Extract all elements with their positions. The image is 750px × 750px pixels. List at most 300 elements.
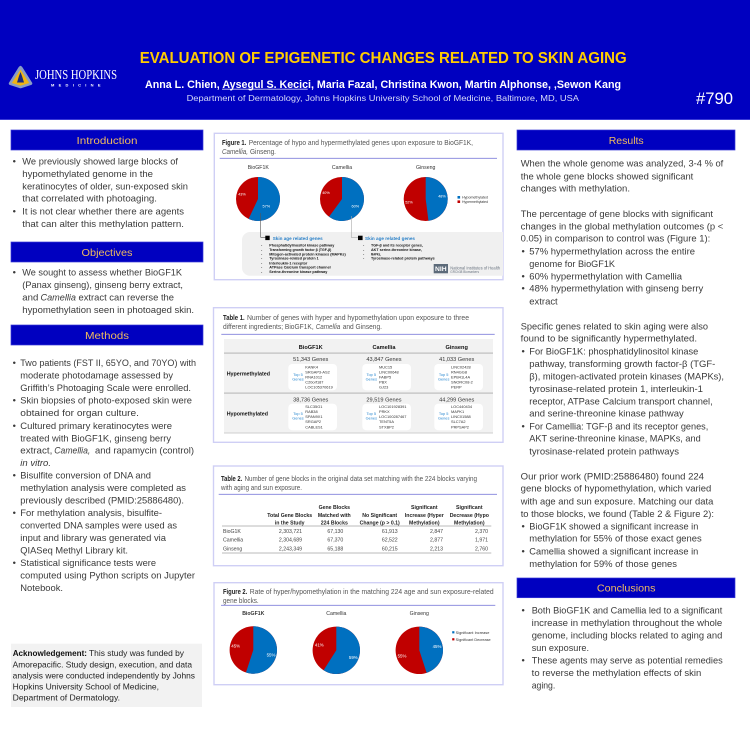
table 1 grid: 38,736 Genes bbox=[293, 397, 328, 403]
table 2 data: 2,877 bbox=[430, 538, 443, 544]
gene box: Ginseng hypomethylated: Top 5 bbox=[439, 411, 448, 416]
gene list: Camellia: - bbox=[363, 248, 365, 252]
pie chart: BioGF1K significance bbox=[230, 611, 277, 674]
table 1 grid: Camellia bbox=[372, 345, 396, 351]
text block: specific genes: receptor, ATPase Calcium transport channel, bbox=[529, 395, 713, 406]
acknowledgement box: Amorepacific. Study design, execution, and data bbox=[13, 659, 192, 669]
gene box: Ginseng hypomethylated: Genes bbox=[438, 416, 449, 421]
pie chart: Ginseng: 48% bbox=[438, 195, 446, 199]
gene box: Camellia hypermethylated: GJ23 bbox=[379, 384, 388, 389]
figure 2 caption: Rate of hyper/hypomethylation in the matching 224 age and sun exposure-related bbox=[250, 587, 494, 596]
heading: objectives: Objectives bbox=[82, 247, 132, 259]
text block: objectives bullets: We sought to assess whether BioGF1K bbox=[22, 266, 183, 277]
gene box: BioGF1K hypomethylated: SRGAP2 bbox=[305, 419, 321, 424]
legend: Hypomethylated bbox=[462, 196, 488, 200]
text block: specific genes: and serine-threonine kinase pathway bbox=[529, 408, 684, 419]
pie chart: Camellia significance: Camellia bbox=[326, 611, 347, 617]
gene box: BioGF1K hypermethylated: RNA1012 bbox=[305, 375, 322, 380]
heading: objectives bbox=[11, 242, 203, 262]
gene box: BioGF1K hypomethylated: CABLES1 bbox=[305, 424, 323, 429]
gene list: Camellia: AKT serine-threonine kinase, bbox=[371, 248, 422, 252]
text block: methods bullets: methylation analysis were completed as bbox=[20, 482, 186, 493]
text block: specific genes: AKT serine-threonine kinase, MAPKs, and bbox=[529, 433, 701, 444]
table 2 data: 224 Blocks bbox=[321, 520, 348, 526]
text block: specific genes: found to be significantly hypermethylated. bbox=[521, 333, 697, 344]
gene box: Camellia hypomethylated: Genes bbox=[366, 416, 377, 421]
table 2 data: No Significant bbox=[362, 513, 397, 519]
logo: NIH: GRCh38 Biomarkers bbox=[450, 270, 479, 274]
pie chart: Ginseng significance: 45% bbox=[433, 644, 441, 649]
gene list: BioGF1K: Tyrosinase-related protein 1 bbox=[269, 257, 319, 261]
logo: NIH: NIH bbox=[435, 266, 447, 273]
text block: objectives bullets: extract can reverse the bbox=[78, 291, 174, 302]
pie chart: Camellia: Camellia bbox=[332, 165, 352, 171]
gene list: Camellia: MAPKs, bbox=[371, 252, 381, 256]
text block: specific genes: • bbox=[522, 345, 525, 356]
text block: introduction bullets: We previously showed large blocks of bbox=[22, 155, 178, 166]
gene list: BioGF1K: - bbox=[261, 257, 263, 261]
table 1 caption: Table 1. bbox=[223, 313, 245, 322]
table 2 data: 61,913 bbox=[382, 529, 398, 535]
connector: Camellia bbox=[351, 216, 358, 237]
legend: Significant Increase bbox=[456, 631, 489, 635]
header banner bbox=[0, 0, 750, 120]
table 1 grid: 51,343 Genes bbox=[293, 357, 328, 363]
table 2 caption: Table 2. bbox=[221, 474, 242, 483]
pie chart: BioGF1K significance: 45% bbox=[231, 643, 240, 648]
table 1 caption: Number of genes with hyper and hypomethylation upon exposure to three bbox=[247, 313, 469, 322]
pie chart: Camellia bbox=[320, 165, 364, 221]
gene box: BioGF1K hypomethylated bbox=[288, 404, 337, 430]
panel: table 1 bbox=[214, 308, 503, 442]
table 2 data: 2,304,689 bbox=[279, 538, 302, 544]
heading: results bbox=[517, 130, 735, 150]
text block: global methylation outcomes: • bbox=[522, 270, 525, 281]
acknowledgement box bbox=[11, 644, 202, 707]
text block: specific genes bbox=[521, 320, 724, 456]
table 1 grid: 44,299 Genes bbox=[439, 397, 474, 403]
gene box: Ginseng hypomethylated: SLC7A2 bbox=[451, 419, 466, 424]
text block: prior work: Our prior work (PMID:25886480) found 224 bbox=[521, 470, 704, 481]
text block: methods bullets: moderate photodamage assessed by bbox=[20, 370, 173, 381]
text block: global methylation outcomes: genome for BioGF1K bbox=[529, 258, 616, 269]
gene box: Ginseng hypermethylated: RN4GG8 bbox=[451, 370, 467, 375]
text block: conclusions bullets: aging. bbox=[532, 680, 555, 691]
gene box: Camellia hypomethylated bbox=[362, 404, 411, 430]
gene box: Camellia hypermethylated: PBX bbox=[379, 380, 387, 385]
acknowledgement box: Department of Dermatology. bbox=[13, 693, 120, 703]
table 1 grid: Ginseng bbox=[446, 345, 468, 351]
figure 1 caption: Camellia, bbox=[222, 147, 248, 156]
gene box: BioGF1K hypomethylated: SLC35G1 bbox=[305, 404, 322, 409]
text block: whole genome: When the whole genome was analyzed, 3-4 % of bbox=[521, 158, 724, 169]
gene box: BioGF1K hypermethylated: KANK4 bbox=[305, 365, 319, 370]
panel: table 2 bbox=[214, 466, 503, 566]
table 2 data: Total Gene Blocks bbox=[267, 513, 312, 519]
gene box: Camellia hypermethylated: Top 5 bbox=[367, 372, 376, 377]
authors: Anna L. Chien, Aysegul S. Kecici, Maria Fazal, Christina Kwon, Martin Alphonse, ,Sewon Kang bbox=[145, 79, 621, 91]
legend: Hypermethylated bbox=[462, 200, 488, 204]
gene box: BioGF1K hypomethylated: RAB38 bbox=[305, 409, 318, 414]
table 2 data: 2,847 bbox=[430, 529, 443, 535]
gene list: Camellia: Tyrosinase-related protein pathways bbox=[371, 257, 435, 261]
text block: introduction bullets: that can alter this methylation pattern. bbox=[22, 218, 184, 229]
heading: introduction bbox=[11, 130, 203, 150]
pie chart: Camellia significance: 41% bbox=[315, 642, 324, 647]
gene list: BioGF1K: Serine-threonine kinase pathway bbox=[269, 270, 328, 274]
affiliation: Department of Dermatology, Johns Hopkins University School of Medicine, Baltimore, MD, USA bbox=[187, 93, 579, 103]
text block: conclusions bullets: Both BioGF1K and Camellia led to a significant bbox=[532, 605, 723, 616]
panel: figure 1 bbox=[214, 133, 503, 280]
text block: objectives bullets: • bbox=[13, 266, 16, 277]
logo: NIH: National Institutes of Health bbox=[450, 266, 501, 270]
table 2 data: 2,243,349 bbox=[279, 546, 302, 552]
sub-heading: BioGF1K genes: Skin age related genes bbox=[273, 236, 323, 242]
text block: methods bullets: Griffith’s Photoaging Scale were enrolled. bbox=[20, 382, 191, 393]
title: EVALUATION OF EPIGENETIC CHANGES RELATED TO SKIN AGING bbox=[140, 50, 627, 67]
table 1 grid: 29,519 Genes bbox=[366, 397, 402, 403]
gene box: Camellia hypermethylated: Genes bbox=[366, 376, 377, 381]
table 2 data: Ginseng bbox=[223, 546, 242, 552]
text block: whole genome: changes with methylation. bbox=[521, 183, 630, 194]
pie chart: Ginseng: 52% bbox=[405, 201, 413, 205]
pie chart: BioGF1K significance: BioGF1K bbox=[242, 611, 265, 617]
text block: methods bullets: Statistical significance tests were bbox=[20, 557, 156, 568]
text block: introduction bullets: hypomethylated genome in the bbox=[22, 168, 153, 179]
text block: methods bullets: Camellia, bbox=[54, 445, 90, 456]
heading: introduction: Introduction bbox=[76, 135, 138, 147]
gene list: BioGF1K: - bbox=[261, 243, 263, 247]
text block: global methylation outcomes: • bbox=[522, 245, 525, 256]
pie chart: Camellia: 60% bbox=[351, 205, 360, 209]
text block: prior work: • bbox=[522, 520, 525, 531]
pie chart: BioGF1K: 57% bbox=[262, 205, 271, 209]
table 2 data: 1,971 bbox=[475, 538, 488, 544]
text block: introduction bullets: • bbox=[13, 155, 16, 166]
pie chart: Camellia significance: 59% bbox=[349, 655, 358, 660]
text block: whole genome bbox=[521, 158, 724, 194]
table 2 data: Change (p > 0.1) bbox=[360, 520, 400, 526]
panel: objectives bbox=[11, 242, 203, 315]
text block: introduction bullets: that correlated with photoaging. bbox=[22, 193, 157, 204]
gene list: BioGF1K: - bbox=[261, 266, 263, 270]
gene box: Ginseng hypomethylated: LINC01588 bbox=[451, 414, 471, 419]
gene box: BioGF1K hypermethylated bbox=[288, 364, 337, 390]
table 2 data: 65,188 bbox=[327, 546, 343, 552]
gene box: Ginseng hypermethylated: EPB41L4A bbox=[451, 375, 470, 380]
legend: Significant Decrease bbox=[456, 638, 491, 642]
table 2 data: Gene Blocks bbox=[319, 505, 350, 511]
acknowledgement box: This study was funded by bbox=[89, 648, 185, 658]
table 2 data bbox=[222, 505, 491, 553]
gene box: Camellia hypermethylated bbox=[362, 364, 411, 390]
gene box: BioGF1K hypomethylated: Genes bbox=[292, 416, 304, 421]
table 2 data: Matched with bbox=[318, 513, 351, 519]
callout: skin age related genes bbox=[242, 213, 503, 276]
text block: conclusions bullets: • bbox=[522, 655, 525, 666]
text block: methods bullets: Bisulfite conversion of DNA and bbox=[20, 469, 151, 480]
pie chart: Camellia: 40% bbox=[322, 191, 330, 195]
gene box: Camellia hypermethylated: FABP5 bbox=[379, 375, 391, 380]
text block: prior work: methylation for 55% of those exact genes bbox=[529, 533, 702, 544]
heading: methods bbox=[11, 325, 203, 345]
pie chart: Ginseng significance bbox=[396, 611, 443, 674]
gene box: Camellia hypermethylated: LINC00648 bbox=[379, 370, 399, 375]
table 2 data: 67,130 bbox=[327, 529, 343, 535]
table 2 caption bbox=[220, 474, 477, 492]
text block: methods bullets: • bbox=[13, 557, 16, 568]
gene list: Camellia: - bbox=[363, 243, 365, 247]
text block: methods bullets: • bbox=[13, 357, 16, 368]
panel: introduction bbox=[11, 130, 203, 229]
gene box: Ginseng hypomethylated bbox=[434, 404, 483, 430]
table 2 data: Camellia bbox=[223, 538, 243, 544]
text block: global methylation outcomes: • bbox=[522, 283, 525, 294]
gene list: BioGF1K: - bbox=[261, 252, 263, 256]
logo: Johns Hopkins Medicine bbox=[9, 66, 117, 88]
table 1 caption: different ingredients; BioGF1K, bbox=[223, 322, 314, 331]
gene box: Ginseng hypermethylated: Genes bbox=[438, 376, 449, 381]
gene list: BioGF1K: Mitogen-activated protein kinases (MAPKs) bbox=[269, 252, 346, 256]
gene box: Ginseng hypermethylated: SNORC08-2 bbox=[451, 380, 473, 385]
text block: conclusions bullets: increase in methylation throughout the whole bbox=[532, 617, 722, 628]
gene box: BioGF1K hypomethylated: SPAN9X1 bbox=[305, 414, 323, 419]
pie chart: BioGF1K bbox=[236, 165, 280, 221]
text block: prior work: • bbox=[522, 545, 525, 556]
logo: Johns Hopkins Medicine: JOHNS HOPKINS bbox=[35, 67, 117, 82]
text block: global methylation outcomes: 48% hypermethylation with ginseng berry bbox=[529, 283, 704, 294]
gene list: BioGF1K: - bbox=[261, 261, 263, 265]
table 2 data: BioG1K bbox=[223, 529, 241, 535]
text block: conclusions bullets: sun exposure. bbox=[532, 642, 589, 653]
gene list: Camellia bbox=[363, 243, 435, 261]
text block: methods bullets: For methylation analysis, bisulfite- bbox=[20, 507, 162, 518]
pie chart: BioGF1K: 43% bbox=[238, 192, 246, 196]
connector: BioGF1K bbox=[261, 213, 266, 237]
gene box: Ginseng hypomethylated: MAPK1 bbox=[451, 409, 464, 414]
text block: introduction bullets: It is not clear whether there are agents bbox=[22, 205, 184, 216]
heading: methods: Methods bbox=[85, 330, 129, 342]
gene box: Ginseng hypermethylated: LINC02428 bbox=[451, 365, 471, 370]
text block: methods bullets: • bbox=[13, 469, 16, 480]
sub-heading: Camellia genes bbox=[358, 236, 415, 242]
gene list: Camellia: - bbox=[363, 252, 365, 256]
figure 1 caption: Ginseng. bbox=[250, 147, 276, 156]
text block: prior work: Camellia showed a significant increase in bbox=[529, 545, 698, 556]
legend bbox=[452, 631, 491, 642]
panel: results bbox=[517, 130, 735, 569]
pie chart: Camellia significance bbox=[313, 611, 360, 674]
pie chart: Ginseng bbox=[404, 165, 448, 221]
text block: specific genes: • bbox=[522, 421, 525, 432]
gene box: BioGF1K hypermethylated: Genes bbox=[292, 376, 304, 381]
text block: introduction bullets bbox=[13, 155, 188, 229]
text block: methods bullets: Skin biopsies of photo-exposed skin were bbox=[20, 395, 192, 406]
text block: conclusions bullets: These agents may serve as potential remedies bbox=[532, 655, 723, 666]
acknowledgement box: Acknowledgement: bbox=[13, 648, 87, 658]
table 2 data: Methylation) bbox=[454, 520, 485, 526]
figure 1 caption: Figure 1. bbox=[222, 138, 246, 147]
text block: methods bullets: Notebook. bbox=[20, 582, 63, 593]
gene box: BioGF1K hypermethylated: LOC105370619 bbox=[305, 384, 333, 389]
table 1 grid: 43,847 Genes bbox=[366, 357, 402, 363]
pie chart: Ginseng significance: Ginseng bbox=[410, 611, 429, 617]
text block: whole genome: the whole gene blocks showed significant bbox=[521, 170, 694, 181]
text block: introduction bullets: keratinocytes of older, sun-exposed skin bbox=[22, 180, 188, 191]
text block: specific genes: For BioGF1K: phosphatidylinositol kinase bbox=[529, 345, 698, 356]
gene box: Camellia hypomethylated: STXBP2 bbox=[379, 424, 394, 429]
pie chart: BioGF1K: BioGF1K bbox=[248, 165, 269, 171]
gene box: Ginseng hypomethylated: LOC440434 bbox=[451, 404, 473, 409]
heading: results: Results bbox=[609, 135, 644, 147]
pie chart: Ginseng significance: 55% bbox=[398, 654, 406, 659]
text block: specific genes: For Camellia: TGF-β and its receptor genes, bbox=[529, 421, 708, 432]
text block: conclusions bullets: genome, including blocks related to aging and bbox=[532, 630, 722, 641]
text block: conclusions bullets: to reverse the methylation effects of skin bbox=[532, 667, 701, 678]
gene box: Camellia hypomethylated: Top 5 bbox=[367, 411, 376, 416]
gene list: BioGF1K: Transforming growth factor β (TGF-β) bbox=[269, 248, 332, 252]
gene box: BioGF1K hypomethylated: Top 5 bbox=[293, 411, 303, 416]
table 2 caption: with aging and sun exposure. bbox=[220, 483, 302, 492]
gene list: BioGF1K: - bbox=[261, 248, 263, 252]
text block: methods bullets: Cultured primary keratinocytes were bbox=[20, 420, 172, 431]
gene box: Camellia hypomethylated: TENT5A bbox=[379, 419, 394, 424]
text block: global methylation outcomes: 57% hypermethylation across the entire bbox=[529, 245, 695, 256]
table 2 data: 60,215 bbox=[382, 546, 398, 552]
text block: global methylation outcomes: The percentage of gene blocks with significant bbox=[521, 208, 713, 219]
text block: methods bullets: previously described (PMID:25886480). bbox=[20, 494, 184, 505]
text block: methods bullets: converted DNA samples were used as bbox=[20, 519, 177, 530]
text block: methods bullets: and rapamycin (control) bbox=[95, 445, 194, 456]
table 2 data: in the Study bbox=[275, 520, 305, 526]
gene box: BioGF1K hypermethylated: C20orf187 bbox=[305, 380, 323, 385]
table 1 caption bbox=[223, 313, 469, 331]
text block: prior work: methylation for 59% of those genes bbox=[529, 558, 677, 569]
table 2 data: Decrease (Hypo bbox=[450, 513, 489, 519]
panel: methods bbox=[11, 325, 203, 593]
gene list: BioGF1K bbox=[261, 243, 346, 274]
poster number: #790 bbox=[696, 90, 733, 108]
text block: objectives bullets: Camellia bbox=[40, 291, 76, 302]
text block: global methylation outcomes: changes in the global methylation outcomes (p < bbox=[521, 220, 724, 231]
text block: methods bullets: QIASeq Methyl Library kit. bbox=[20, 544, 128, 555]
gene box: Ginseng hypermethylated: Top 5 bbox=[439, 372, 448, 377]
text block: specific genes: Specific genes related to skin aging were also bbox=[521, 320, 708, 331]
table 2 data: Significant bbox=[411, 505, 438, 511]
text block: objectives bullets: hypomethylation seen in photoaged skin. bbox=[22, 304, 194, 315]
figure 2 caption: Figure 2. bbox=[223, 587, 247, 596]
table 2 data: Significant bbox=[456, 505, 483, 511]
figure 1 caption: Percentage of hypo and hypermethylated genes upon exposure to BioGF1K, bbox=[249, 138, 473, 147]
text block: methods bullets: • bbox=[13, 420, 16, 431]
text block: methods bullets: treated with BioGF1K, ginseng berry bbox=[20, 432, 171, 443]
panel: conclusions bbox=[517, 578, 735, 691]
pie chart: BioGF1K significance: 55% bbox=[267, 652, 275, 657]
logo: NIH bbox=[434, 264, 501, 274]
text block: methods bullets: obtained for organ culture. bbox=[20, 407, 139, 418]
text block: objectives bullets: (Panax ginseng), ginseng berry extract, bbox=[22, 279, 183, 290]
text block: methods bullets: • bbox=[13, 507, 16, 518]
table 1 caption: Camellia bbox=[316, 322, 340, 331]
figure 2 caption bbox=[223, 587, 494, 605]
row label: hypomethylated: Hypomethylated bbox=[227, 411, 269, 417]
text block: prior work bbox=[520, 470, 714, 569]
text block: methods bullets: computed using Python scripts on Jupyter bbox=[20, 569, 195, 580]
gene box: Camellia hypomethylated: PRKX bbox=[379, 409, 390, 414]
text block: objectives bullets: and bbox=[22, 291, 38, 302]
text block: methods bullets: extract, bbox=[20, 445, 52, 456]
text block: global methylation outcomes: extract bbox=[529, 295, 558, 306]
text block: global methylation outcomes: 60% hypermethylation with Camellia bbox=[529, 270, 683, 281]
text block: specific genes: tyrosinase-related protein pathways bbox=[529, 445, 679, 456]
gene box: Ginseng hypermethylated bbox=[434, 364, 483, 390]
text block: methods bullets: in vitro. bbox=[20, 457, 51, 468]
row label: hypermethylated: Hypermethylated bbox=[227, 371, 271, 377]
text block: introduction bullets: • bbox=[13, 205, 16, 216]
gene box: Camellia hypomethylated: LOC101928391 bbox=[379, 404, 406, 409]
text block: specific genes: pathway, transforming growth factor-β (TGF- bbox=[529, 358, 715, 369]
logo: Johns Hopkins Medicine: MEDICINE bbox=[51, 82, 101, 88]
gene box: BioGF1K hypermethylated: Top 5 bbox=[293, 372, 303, 377]
text block: prior work: BioGF1K showed a significant increase in bbox=[529, 520, 698, 531]
gene box: Ginseng hypermethylated: PERP bbox=[451, 384, 462, 389]
table 2 data: Methylation) bbox=[409, 520, 440, 526]
text block: specific genes: β), mitogen-activated protein kinases (MAPKs), bbox=[529, 370, 724, 381]
text block: conclusions bullets: • bbox=[522, 605, 525, 616]
text block: methods bullets: Two patients (FST II, 65YO, and 70YO) with bbox=[20, 357, 196, 368]
text block: methods bullets: • bbox=[13, 395, 16, 406]
legend bbox=[458, 196, 488, 204]
table 2 caption: Number of gene blocks in the original data set matching with the 224 blocks varying bbox=[244, 474, 477, 483]
acknowledgement box: Hopkins University School of Medicine, bbox=[13, 682, 159, 692]
text block: conclusions bullets bbox=[522, 605, 723, 691]
gene list: BioGF1K: Interleukin-1 receptor bbox=[269, 261, 308, 265]
figure 2 caption: gene blocks. bbox=[223, 596, 259, 605]
gene box: Camellia hypermethylated: MUC15 bbox=[379, 365, 392, 370]
table 1 grid bbox=[224, 339, 493, 434]
gene list: Camellia: - bbox=[363, 257, 365, 261]
table 2 data: 2,303,721 bbox=[279, 529, 302, 535]
gene list: BioGF1K: ATPase Calcium transport channel bbox=[269, 266, 331, 270]
sub-heading: Camellia genes: Skin age related genes bbox=[365, 236, 415, 242]
gene box: BioGF1K hypermethylated: SRGAP3-AS2 bbox=[305, 370, 330, 375]
pie chart: Ginseng: Ginseng bbox=[416, 165, 435, 171]
table 2 data: 2,370 bbox=[475, 529, 488, 535]
text block: methods bullets: input and library was generated via bbox=[20, 532, 167, 543]
gene list: Camellia: TGF-β and its receptor genes, bbox=[371, 243, 423, 247]
heading: conclusions bbox=[517, 578, 735, 598]
gene box: Ginseng hypomethylated: PRPSAP2 bbox=[451, 424, 469, 429]
panel: figure 2 bbox=[214, 583, 503, 685]
text block: prior work: to those blocks, we found (Table 2 & Figure 2): bbox=[521, 508, 714, 519]
figure 1 caption bbox=[222, 138, 473, 156]
text block: global methylation outcomes bbox=[521, 208, 724, 306]
text block: prior work: with age and sun exposure. Matching our data bbox=[520, 495, 714, 506]
table 2 data: 2,760 bbox=[475, 546, 488, 552]
gene list: BioGF1K: - bbox=[261, 270, 263, 274]
table 2 data: 62,522 bbox=[382, 538, 398, 544]
text block: specific genes: tyrosinase-related protein 1, interleukin-1 bbox=[529, 383, 703, 394]
table 2 data: 2,213 bbox=[430, 546, 443, 552]
gene box: Camellia hypomethylated: LOC100287467 bbox=[379, 414, 406, 419]
text block: methods bullets bbox=[13, 357, 196, 593]
text block: objectives bullets bbox=[13, 266, 194, 315]
table 2 data: Increase (Hyper bbox=[405, 513, 444, 519]
text block: global methylation outcomes: 0.05) in comparison to control was (Figure 1): bbox=[521, 233, 710, 244]
heading: conclusions: Conclusions bbox=[597, 583, 656, 595]
table 2 data: 67,370 bbox=[327, 538, 343, 544]
gene list: BioGF1K: Phosphatidylinositol kinase pathway bbox=[269, 243, 335, 247]
